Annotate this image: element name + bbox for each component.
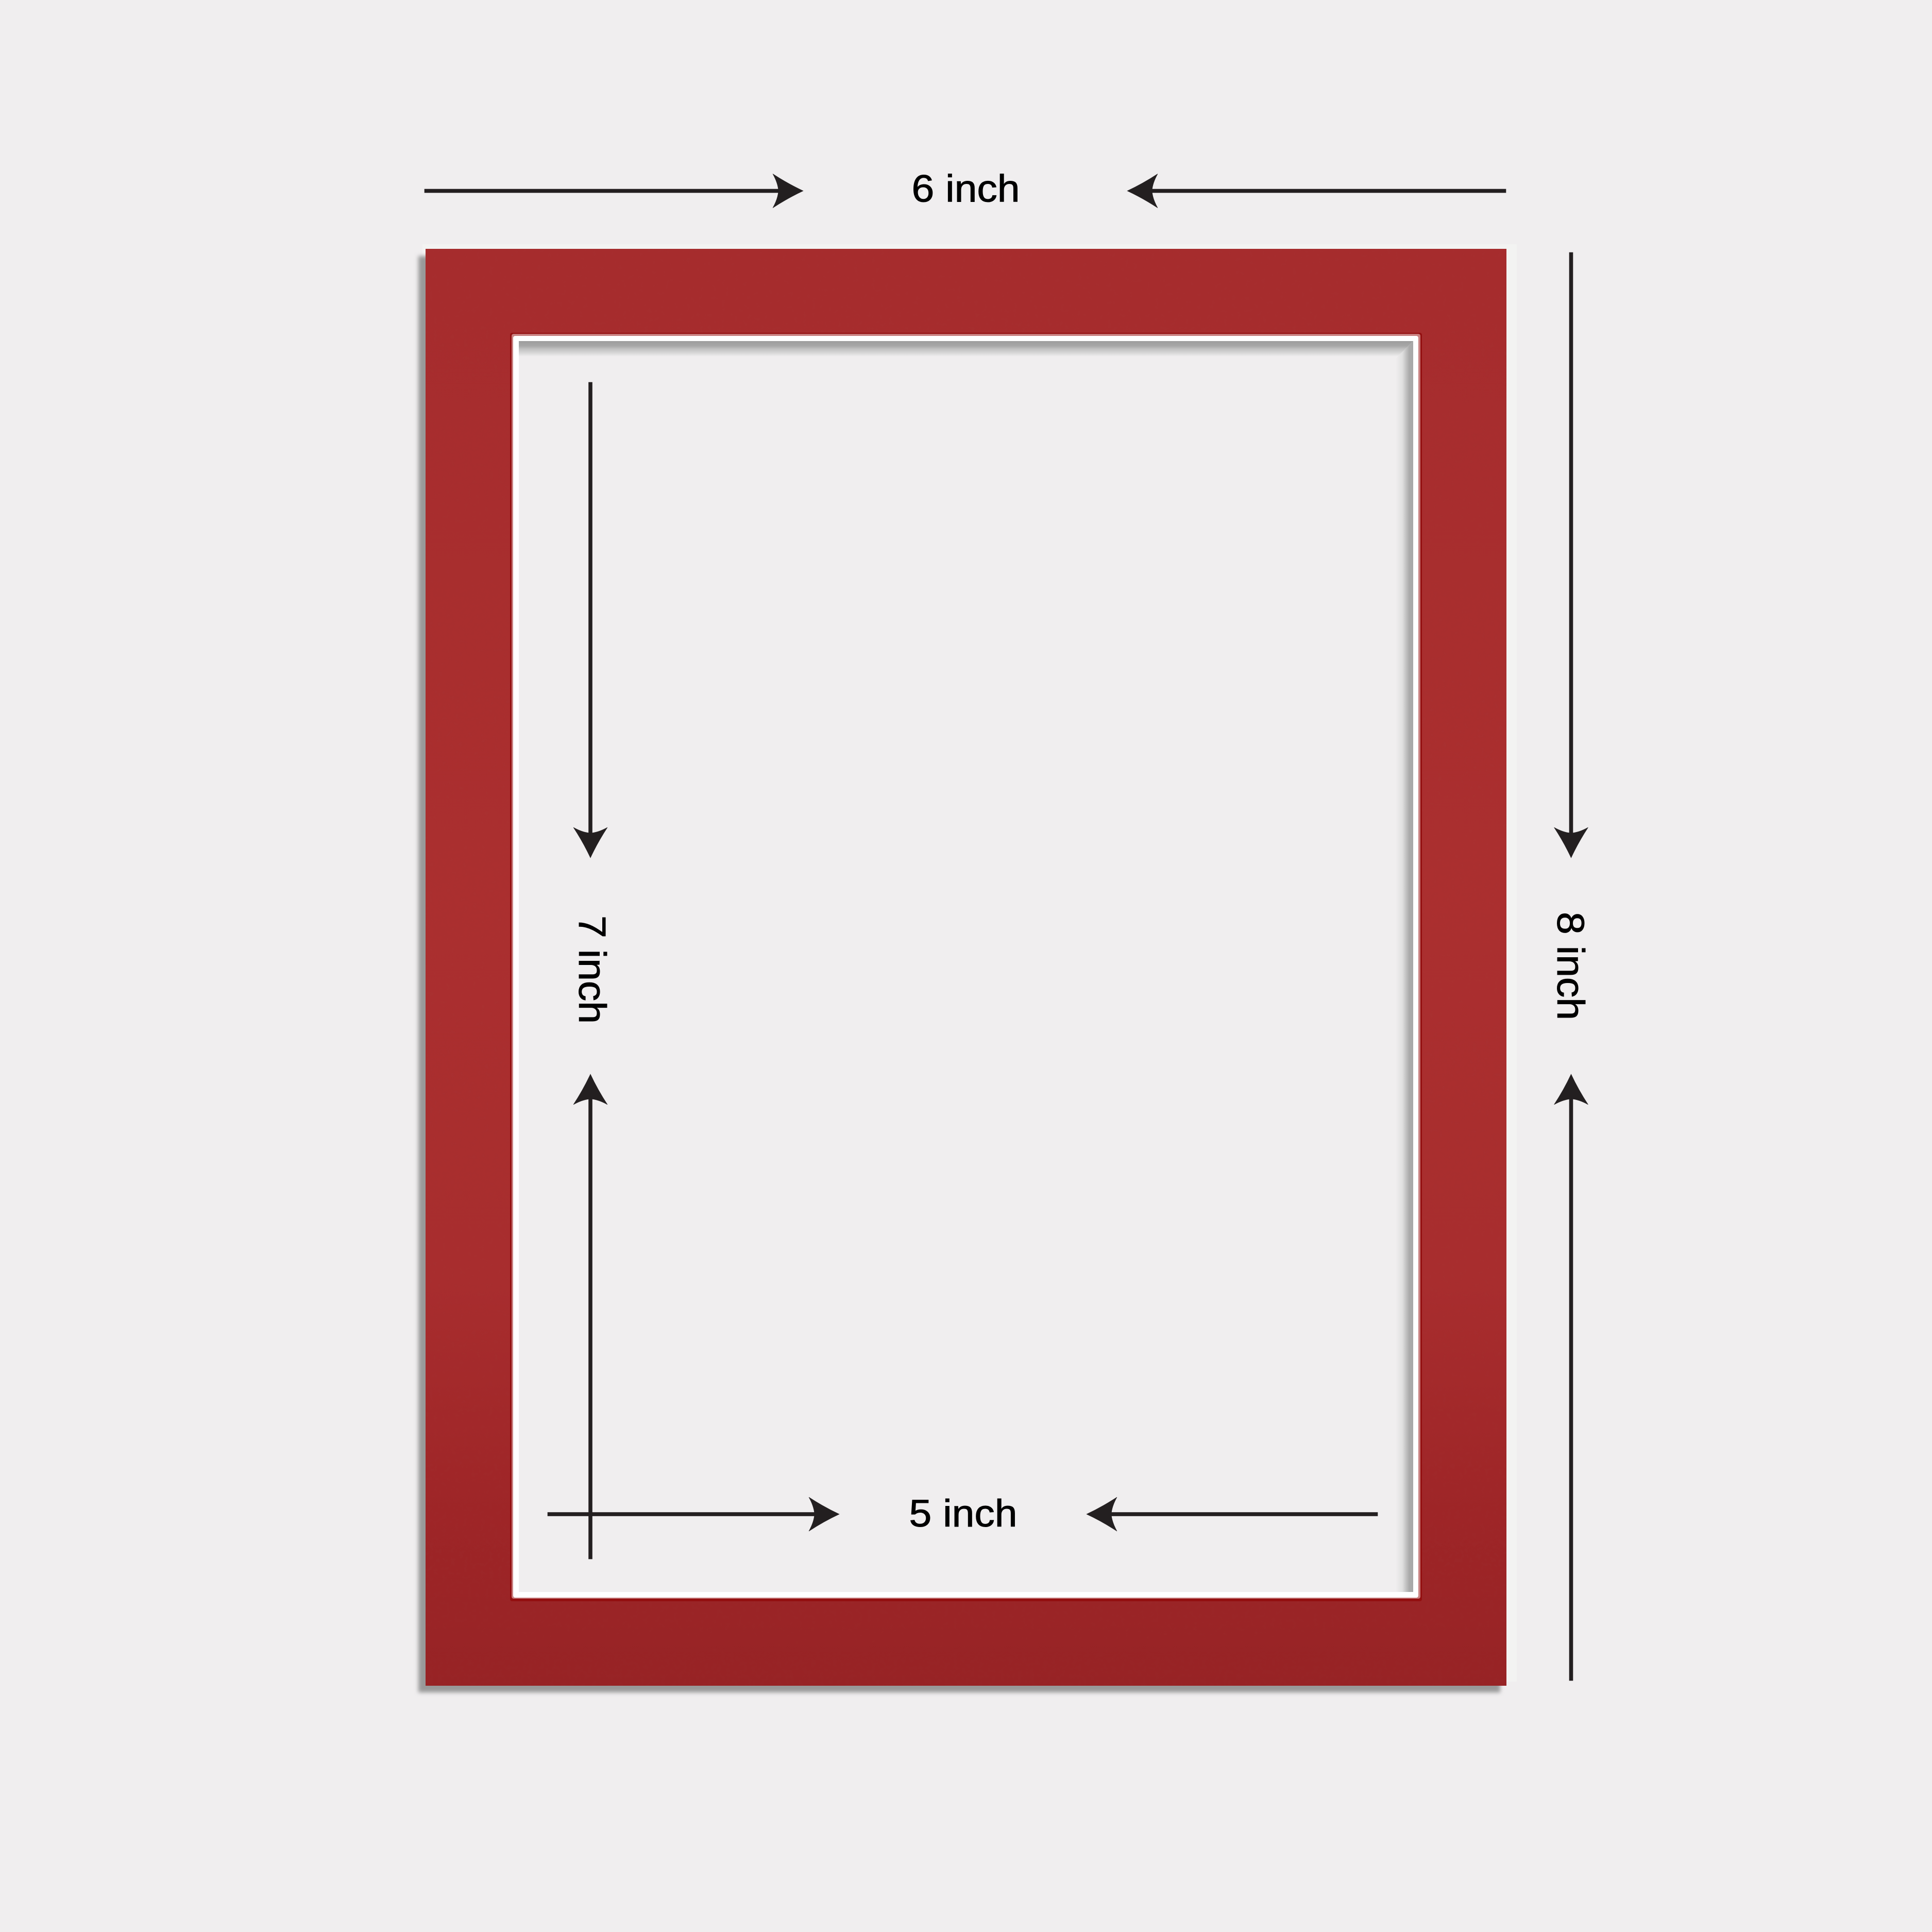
- red mat frame: [418, 244, 1517, 1692]
- upper arrow: [573, 382, 607, 858]
- label: 6 inch: [912, 167, 1020, 210]
- top dimension: 6 inch: [425, 167, 1506, 210]
- bevel transition: [512, 334, 1420, 1599]
- window top shadow: [519, 341, 1413, 359]
- upper arrow: [1554, 252, 1588, 858]
- white bevel: [513, 336, 1418, 1598]
- right dimension: 8 inch: [1549, 252, 1592, 1681]
- mat texture: [426, 249, 1506, 1686]
- label: 8 inch: [1549, 912, 1592, 1020]
- left arrow: [548, 1497, 839, 1531]
- frame edge glow: [422, 244, 1517, 1682]
- bevel cut edge: [510, 333, 1422, 1601]
- label: 7 inch: [571, 916, 614, 1024]
- frame drop shadow: [418, 256, 1500, 1692]
- mat board: [426, 249, 1506, 1686]
- inner dimension: 5 inch: [548, 1492, 1378, 1535]
- label: 5 inch: [909, 1492, 1017, 1535]
- left arrow: [425, 174, 803, 208]
- lower arrow: [573, 1074, 607, 1559]
- inner dimension: 7 inch: [571, 382, 614, 1559]
- window right shadow: [1396, 341, 1413, 1592]
- lower arrow: [1554, 1074, 1588, 1681]
- window opening: [519, 341, 1413, 1592]
- right arrow: [1127, 174, 1506, 208]
- right arrow: [1087, 1497, 1378, 1531]
